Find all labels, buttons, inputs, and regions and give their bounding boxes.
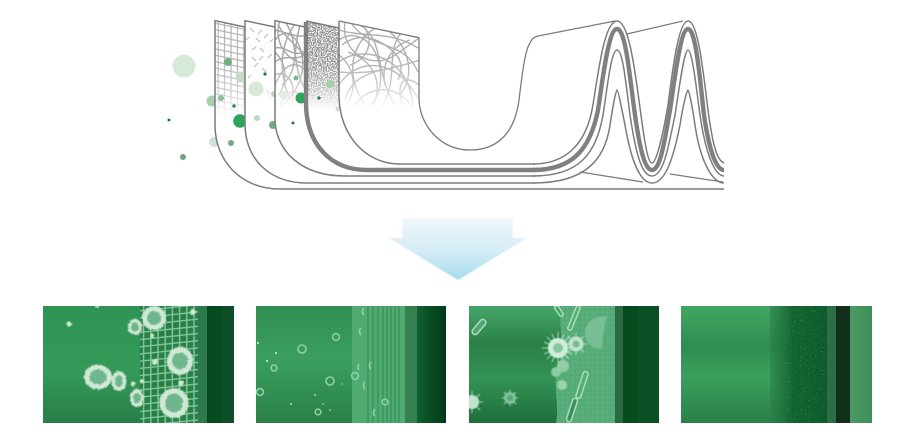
small dots xyxy=(257,342,343,411)
layer 1: coarse grid xyxy=(215,18,724,189)
arrow pointing down xyxy=(389,218,527,280)
captured virus clusters xyxy=(66,304,196,418)
rod bacteria xyxy=(471,305,589,422)
light membrane xyxy=(556,306,615,423)
pleat strip xyxy=(352,306,417,423)
layer 2: sparse dashes xyxy=(245,21,535,183)
panel 3: bacteria and viruses on membrane xyxy=(461,305,659,423)
pale half capsule xyxy=(585,316,607,349)
filter layers diagram xyxy=(168,18,724,189)
ring particles xyxy=(257,308,388,416)
particles outside the filter xyxy=(168,54,219,160)
pleated folds xyxy=(533,21,724,183)
mesh grid xyxy=(140,306,198,423)
panel 4: fine speckled filter layer xyxy=(681,306,872,423)
speckled band xyxy=(770,306,827,423)
layer 3: woven fibres xyxy=(275,20,535,176)
panel 2: pleated layer with ring particles xyxy=(256,306,446,423)
spiky viruses xyxy=(461,332,587,413)
layer 5: fine fibre sheet xyxy=(339,21,615,164)
panel 1: mesh pre-filter catching large particles xyxy=(43,306,234,423)
layer 4: dense stippled membrane xyxy=(305,20,535,170)
